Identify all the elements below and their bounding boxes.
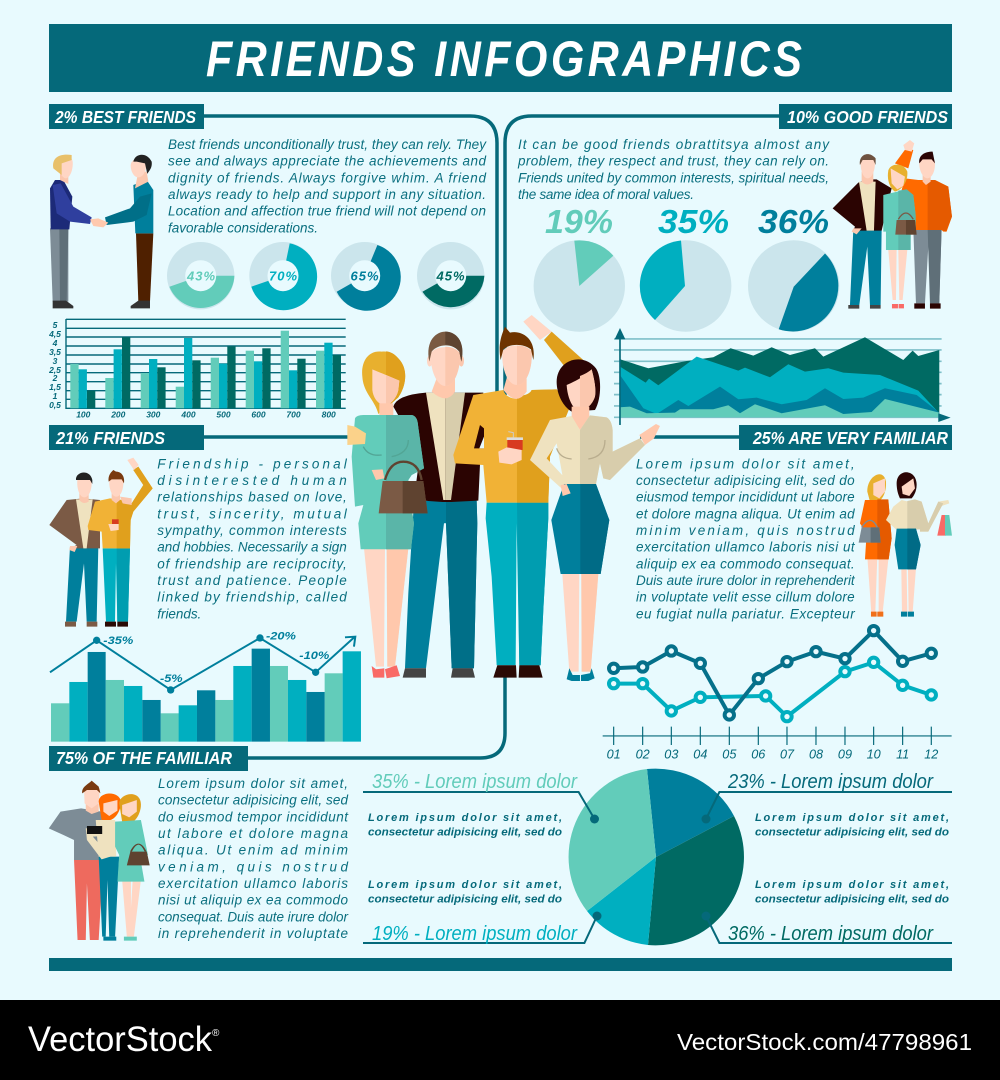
figure: man in yellow sweater	[453, 315, 583, 678]
bar and line chart: friends: -5%	[160, 673, 183, 685]
donut: 70%: 70%	[269, 268, 297, 284]
line chart: very familiar: 04	[693, 748, 707, 762]
text: friends: relationships based on love,	[157, 490, 347, 505]
text: pie notes left bottom: Lorem ipsum dolor sit amet,	[368, 879, 562, 891]
line chart: very familiar: 03	[664, 748, 678, 762]
area chart	[614, 328, 951, 425]
bar chart: best friends: 700	[286, 410, 301, 420]
heading number: 36%: 36%	[758, 203, 829, 240]
text: pie notes right bottom	[755, 879, 949, 906]
pie: 19%	[534, 240, 625, 332]
text: good friends: problem, they respect and trust, they can rely on.	[517, 154, 829, 169]
text: friends: friends.	[157, 606, 201, 621]
bar chart: best friends: 1	[53, 391, 58, 401]
bar chart: best friends: 1,5	[49, 382, 61, 392]
text: pie notes right top: Lorem ipsum dolor sit amet,	[755, 812, 949, 824]
text: very familiar: et dolore magna aliqua. Ut enim ad	[636, 506, 855, 521]
text: of the familiar: do eiusmod tempor incididunt	[158, 809, 349, 824]
line chart: very familiar: 01	[607, 748, 621, 762]
bar chart: best friends: 2,5	[48, 365, 61, 375]
text: of the familiar: aliqua. Ut enim ad minim	[158, 843, 348, 858]
bar chart: best friends: 4,5	[48, 329, 61, 339]
title banner: FRIENDS INFOGRAPHICS	[206, 31, 802, 87]
text: pie notes left top	[368, 812, 562, 838]
text: very familiar: Lorem ipsum dolor sit amet,	[636, 456, 855, 471]
text: pie notes left top: consectetur adipisicing elit, sed do	[368, 826, 562, 838]
text: pie notes right bottom: Lorem ipsum dolor sit amet,	[755, 879, 949, 891]
bar chart: best friends: 0,5	[49, 400, 61, 410]
donut: 43%	[167, 242, 234, 309]
text: good friends: the same idea of moral values.	[518, 187, 694, 202]
bar and line chart: friends: -35%	[103, 635, 134, 647]
heading number: 35%: 35%	[658, 203, 729, 240]
watermark strip: ®	[212, 1028, 220, 1039]
heading: 25% are very familiar: 25% ARE VERY FAMILIAR	[752, 428, 948, 448]
donut: 45%: 45%	[436, 268, 465, 284]
donut: 65%	[331, 242, 401, 311]
bar chart: best friends: 300	[146, 410, 161, 420]
text: friends: sympathy, common interests	[157, 523, 347, 538]
text: of the familiar	[158, 776, 349, 941]
text: of the familiar: ut labore et dolore magna	[158, 826, 348, 841]
callout: 19%: 19% - Lorem ipsum dolor	[372, 923, 578, 945]
text: of the familiar: consequat. Duis aute irure dolor	[158, 909, 348, 924]
text: pie notes right top: consectetur adipisicing elit, sed do	[755, 826, 949, 838]
text: friends	[157, 456, 348, 621]
heading: 2% best friends: 2% BEST FRIENDS	[54, 107, 196, 127]
line chart: very familiar: 09	[838, 748, 852, 762]
line chart: very familiar: 02	[636, 748, 650, 762]
callout: 36%	[702, 912, 952, 945]
heading: 21% friends: 21% FRIENDS	[55, 428, 165, 448]
text: very familiar: eiusmod tempor incididunt ut labore	[636, 490, 855, 505]
central group figures	[347, 315, 660, 681]
text: of the familiar: veniam, quis nostrud	[158, 859, 348, 874]
figure: man in dark jacket	[393, 332, 483, 678]
text: best friends: always ready to help and support in any situation.	[168, 187, 486, 202]
text: friends: linked by friendship, called	[157, 590, 347, 605]
text: of the familiar: nisi ut aliquip ex ea commodo	[158, 893, 348, 908]
text: friends: of friendship are reciprocity,	[157, 556, 347, 571]
bar chart: best friends: 3,5	[49, 347, 61, 357]
bar chart: best friends: 5	[53, 320, 58, 330]
line chart: very familiar: 07	[780, 748, 795, 762]
bar chart: best friends: 400	[180, 410, 196, 420]
heading number: 19%: 19%	[545, 203, 613, 240]
text: good friends: Friends united by common interests, spiritual needs,	[518, 170, 829, 185]
bar chart: best friends: 800	[322, 410, 336, 420]
text: best friends	[168, 137, 487, 235]
pie: 36%	[748, 240, 839, 332]
figure: selfie trio	[49, 781, 150, 941]
watermark strip	[0, 1000, 1000, 1080]
text: pie notes left bottom	[368, 879, 562, 906]
bar and line chart: friends	[50, 630, 361, 742]
text: of the familiar: consectetur adipisicing elit, sed	[158, 793, 348, 808]
text: best friends: dignity of friends. Always forgive whim. A friend	[168, 170, 486, 185]
text: pie notes right bottom: consectetur adipisicing elit, sed do	[755, 894, 949, 906]
bar chart: best friends: 4	[52, 338, 58, 348]
donut: 70%	[249, 242, 317, 310]
title banner	[49, 24, 952, 92]
watermark strip: VectorStock	[28, 1020, 212, 1059]
bar chart: best friends: 100	[76, 410, 91, 420]
callout: 35%	[363, 771, 599, 824]
bar chart: best friends: 600	[251, 410, 266, 420]
text: of the familiar: exercitation ullamco laboris	[158, 876, 348, 891]
line chart: very familiar	[603, 626, 952, 762]
text: very familiar: minim veniam, quis nostrud	[636, 523, 855, 538]
figure: two friends	[49, 458, 153, 627]
callout: 23%: 23% - Lorem ipsum dolor	[727, 771, 934, 793]
text: very familiar	[636, 456, 856, 621]
donut: 65%: 65%	[350, 268, 379, 284]
text: very familiar: Duis aute irure dolor in reprehenderit	[636, 573, 856, 588]
text: pie notes left top: Lorem ipsum dolor sit amet,	[368, 812, 562, 824]
heading: 21% friends	[49, 425, 204, 450]
text: friends: trust, sincerity, mutual	[157, 506, 348, 521]
line chart: very familiar: 05	[722, 748, 737, 762]
text: friends: and hobbies. Necessarily a sign	[157, 540, 347, 555]
text: good friends: It can be good friends obrattitsya almost any	[518, 137, 830, 152]
callout: 19%	[363, 912, 602, 945]
bar chart: best friends: 3	[53, 356, 58, 366]
text: best friends: see and always appreciate the achievements and	[168, 154, 486, 169]
callout: 35%: 35% - Lorem ipsum dolor	[372, 771, 578, 793]
text: good friends	[517, 137, 830, 202]
footer bar	[49, 958, 952, 971]
pie chart: big	[569, 769, 744, 945]
line chart: very familiar: 06	[751, 748, 766, 762]
figure: three good friends	[833, 140, 952, 309]
pie: 35%	[640, 240, 731, 332]
bar chart: best friends: 2	[52, 373, 58, 383]
heading: 10% good friends: 10% GOOD FRIENDS	[787, 107, 948, 127]
callout: 36%: 36% - Lorem ipsum dolor	[728, 923, 934, 945]
bar chart: best friends	[48, 319, 346, 420]
text: very familiar: aliquip ex ea commodo consequat.	[636, 556, 855, 571]
text: very familiar: eu fugiat nulla pariatur. Excepteur	[636, 606, 855, 621]
text: of the familiar: in reprehenderit in voluptate	[158, 926, 348, 941]
text: of the familiar: Lorem ipsum dolor sit amet,	[158, 776, 348, 791]
line chart: very familiar: 11	[896, 748, 909, 762]
bar chart: best friends: 500	[216, 410, 231, 420]
bar and line chart: friends: -20%	[266, 630, 296, 642]
bar chart: best friends: 200	[110, 410, 126, 420]
figure: woman in blue skirt	[530, 359, 660, 681]
watermark strip: VectorStock.com/47798961	[677, 1029, 972, 1055]
text: friends: trust and patience. People	[157, 573, 347, 588]
figure: two women shopping	[859, 472, 952, 617]
bar and line chart: friends: -10%	[299, 650, 330, 662]
callout: 23%	[702, 771, 952, 824]
donut: 45%	[417, 242, 484, 309]
heading: 75% of the familiar: 75% OF THE FAMILIAR	[56, 748, 232, 768]
text: friends: disinterested human	[157, 473, 347, 488]
text: best friends: favorable considerations.	[168, 220, 318, 235]
line chart: very familiar: 12	[924, 748, 938, 762]
text: best friends: Best friends unconditionally trust, they can rely. They	[168, 137, 487, 152]
text: pie notes right top	[755, 812, 949, 838]
text: pie notes left bottom: consectetur adipisicing elit, sed do	[368, 894, 562, 906]
text: best friends: Location and affection true friend will not depend on	[168, 204, 486, 219]
line chart: very familiar: 08	[809, 748, 823, 762]
text: very familiar: in voluptate velit esse cillum dolore	[636, 590, 855, 605]
figure: handshake	[50, 155, 153, 308]
line chart: very familiar: 10	[867, 748, 881, 762]
text: very familiar: consectetur adipisicing elit, sed do	[636, 473, 855, 488]
figure: woman in mint dress	[347, 351, 428, 678]
text: very familiar: exercitation ullamco laboris nisi ut	[636, 540, 856, 555]
donut: 43%: 43%	[186, 268, 215, 284]
text: friends: Friendship - personal	[157, 456, 348, 471]
